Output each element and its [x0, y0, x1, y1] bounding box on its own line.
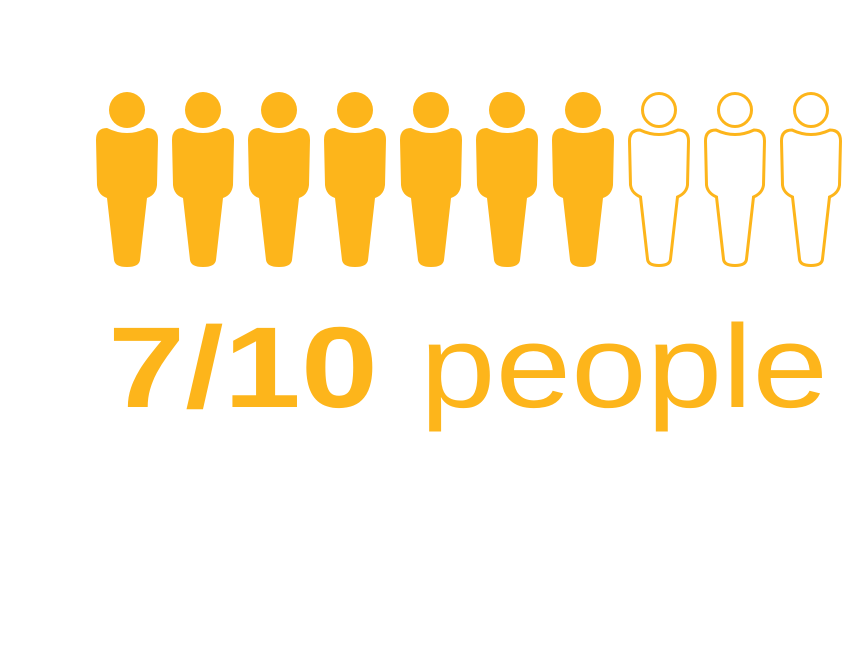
icon: outline person 9 [706, 94, 764, 266]
icon: filled person 4 [324, 92, 386, 267]
stat number: 7/10 [108, 304, 378, 432]
icon: filled person 3 [248, 92, 310, 267]
people icons row [96, 92, 840, 267]
icon: outline person 8 [630, 94, 688, 266]
icon: filled person 6 [476, 92, 538, 267]
icon: outline person 10 [782, 94, 840, 266]
heading: 7/10 people [108, 301, 828, 433]
icon: filled person 5 [400, 92, 462, 267]
icon: filled person 2 [172, 92, 234, 267]
stat label: people [420, 301, 828, 433]
icon: filled person 7 [552, 92, 614, 267]
icon: filled person 1 [96, 92, 158, 267]
